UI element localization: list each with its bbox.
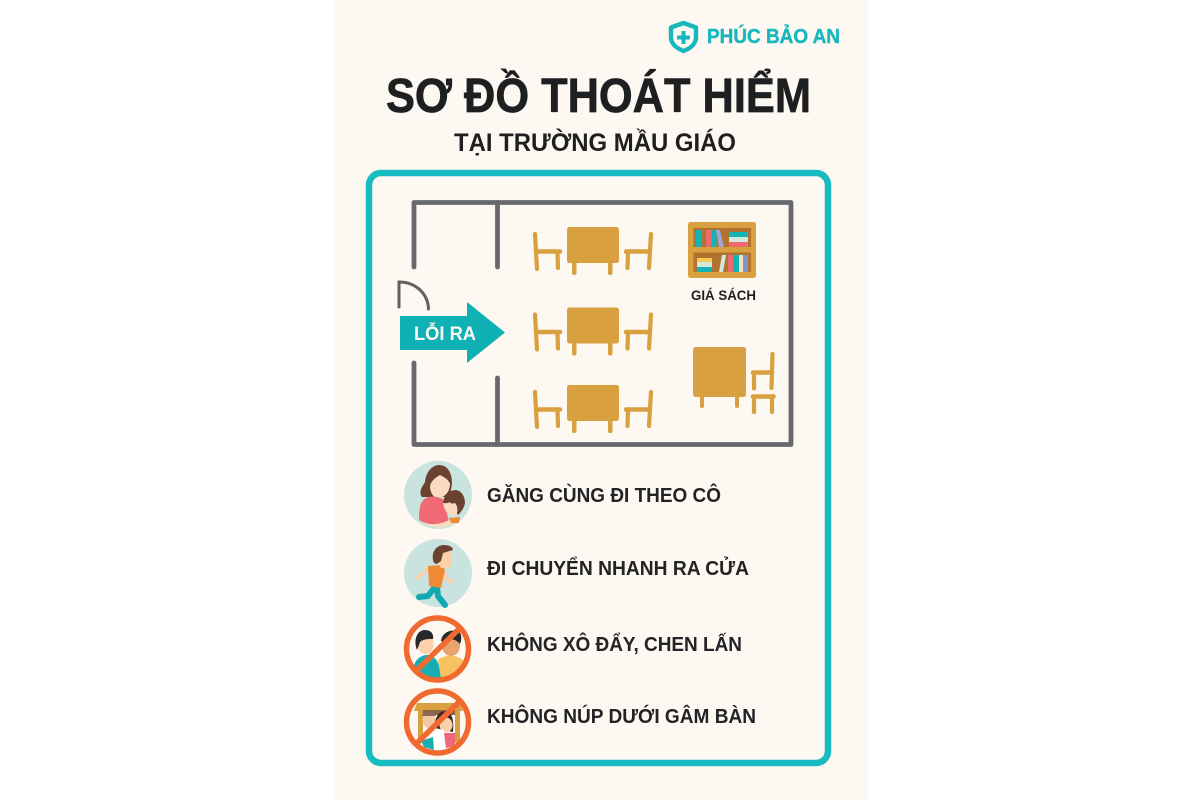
- step 1: [404, 461, 721, 529]
- step 3: [406, 618, 742, 680]
- logo: [671, 23, 840, 51]
- walls: [414, 202, 791, 444]
- corner table and chairs: [693, 347, 774, 412]
- subtitle: TẠI TRƯỜNG MẦU GIÁO: [454, 127, 736, 157]
- step 4 text: KHÔNG NÚP DƯỚI GÂM BÀN: [487, 704, 756, 728]
- door: [399, 282, 428, 309]
- bookshelf: [688, 222, 756, 278]
- step 3 text: KHÔNG XÔ ĐẨY, CHEN LẤN: [487, 632, 742, 656]
- bookshelf label: GIÁ SÁCH: [691, 287, 756, 303]
- panel: evacuation frame: [369, 173, 828, 763]
- table group 1: [535, 227, 651, 275]
- icon: no pushing: [406, 618, 469, 680]
- table group 2: [535, 308, 651, 356]
- step 2: [404, 539, 749, 607]
- icon: no hiding under table: [406, 691, 469, 753]
- step 1 text: GĂNG CÙNG ĐI THEO CÔ: [487, 483, 721, 507]
- icon: shield: [671, 23, 696, 51]
- icon: teacher hugging child: [404, 461, 472, 529]
- step 4: [406, 691, 756, 753]
- exit arrow: LỖI RA: [414, 321, 476, 345]
- title: SƠ ĐỒ THOÁT HIỂM: [386, 68, 811, 123]
- floor plan: [399, 202, 791, 444]
- brand name: PHÚC BẢO AN: [707, 24, 840, 48]
- poster background: [334, 0, 868, 800]
- exit arrow: [400, 302, 505, 363]
- icon: running child: [404, 539, 472, 607]
- table group 3: [535, 385, 651, 433]
- step 2 text: ĐI CHUYỂN NHANH RA CỬA: [487, 556, 749, 580]
